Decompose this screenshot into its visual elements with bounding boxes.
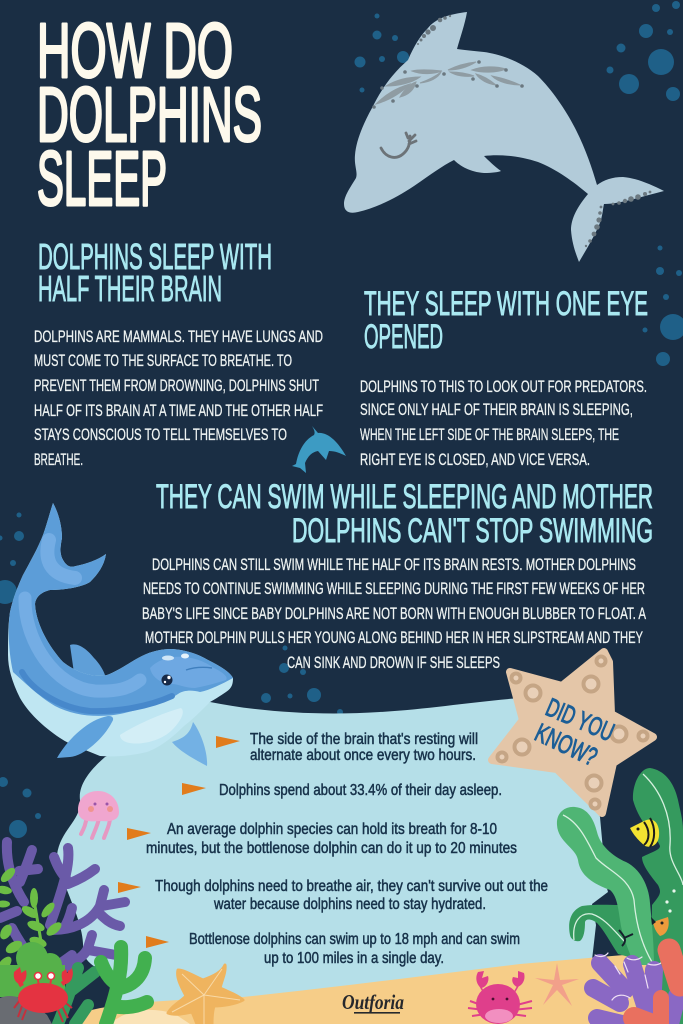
heading: one eye opened [364, 285, 648, 356]
sand [75, 950, 683, 1024]
light belly highlight [120, 708, 183, 744]
heading: one eye opened: OPENED [364, 318, 443, 356]
facts text: The side of the brain that's resting will [250, 731, 478, 748]
icon: red crab [14, 967, 73, 1022]
arrows [118, 736, 240, 948]
facts text: minutes, but the bottlenose dolphin can do it up to 20 minutes [146, 840, 517, 857]
facts text: Though dolphins need to breathe air, they can't survive out out the [155, 878, 548, 895]
coral: green branches [50, 947, 147, 1024]
heading: sleep with half their brain: DOLPHINS SLEEP WITH [38, 236, 272, 277]
panel: did you know background [57, 698, 608, 1024]
facts text: alternate about once every two hours. [250, 747, 476, 764]
text block: half brain: BREATHE. [34, 450, 83, 469]
heading: sleep with half their brain [38, 236, 272, 309]
icon: pink crab [468, 971, 532, 1024]
facts text [146, 731, 548, 967]
icon: yellow fish [630, 818, 659, 847]
text block: one eye [360, 377, 647, 469]
text block: half brain: MUST COME TO THE SURFACE TO BREATHE. TO [34, 351, 292, 370]
heading: swim while sleeping [156, 478, 653, 550]
icon: black fish [619, 930, 633, 946]
coral: purple right [593, 953, 677, 1024]
light sand [110, 1010, 190, 1024]
text block: swim while sleeping: CAN SINK AND DROWN IF SHE SLEEPS [287, 653, 500, 672]
facts text: up to 100 miles in a single day. [264, 950, 444, 967]
label did you know: DID YOU [542, 692, 619, 747]
head lighter [150, 657, 227, 688]
facts text: Dolphins spend about 33.4% of their day asleep. [219, 782, 502, 799]
icon: jellyfish [78, 791, 119, 838]
icon: pink starfish [535, 963, 579, 1006]
rock [0, 996, 52, 1024]
title [37, 8, 262, 222]
title: DOLPHINS [37, 72, 262, 158]
coral: green seaweed left [0, 865, 65, 997]
icon: blue dolphin [8, 503, 233, 766]
garland [376, 62, 520, 104]
pectoral fins [57, 716, 113, 758]
label did you know [530, 692, 619, 772]
facts text: An average dolphin species can hold its breath for 8-10 [167, 821, 497, 838]
title: HOW DO [37, 8, 233, 94]
text block: half brain: PREVENT THEM FROM DROWNING, DOLPHINS SHUT [34, 376, 319, 395]
text block: half brain: HALF OF ITS BRAIN AT A TIME AND THE OTHER HALF [34, 401, 323, 420]
icon: small dolphin [292, 426, 346, 473]
text block: half brain: STAYS CONSCIOUS TO TELL THEMSELVES TO [34, 425, 287, 444]
icon: orange fish [651, 917, 669, 936]
icon: starfish did you know [492, 652, 653, 813]
text block: half brain: DOLPHINS ARE MAMMALS. THEY HAVE LUNGS AND [34, 327, 323, 346]
text block: swim while sleeping [142, 555, 646, 672]
decorative dots [372, 15, 651, 247]
icon: orange starfish [168, 965, 243, 1024]
text block: half brain [34, 327, 323, 469]
eye [162, 674, 172, 686]
icon: closed eye [381, 133, 416, 157]
title: SLEEP [37, 136, 167, 222]
heading: sleep with half their brain: HALF THEIR BRAIN [38, 268, 222, 309]
icon: sleeping dolphin [344, 12, 664, 262]
label did you know: KNOW? [530, 717, 602, 772]
logo: Outforia: Outforia [342, 990, 404, 1014]
coral: orange right [634, 950, 680, 1024]
facts text: water because dolphins need to stay hydrated. [213, 896, 486, 913]
body shading [22, 540, 172, 711]
coral: left purple [0, 842, 125, 972]
seaweed right [557, 768, 683, 1024]
facts text: Bottlenose dolphins can swim up to 18 mph and can swim [189, 931, 520, 948]
